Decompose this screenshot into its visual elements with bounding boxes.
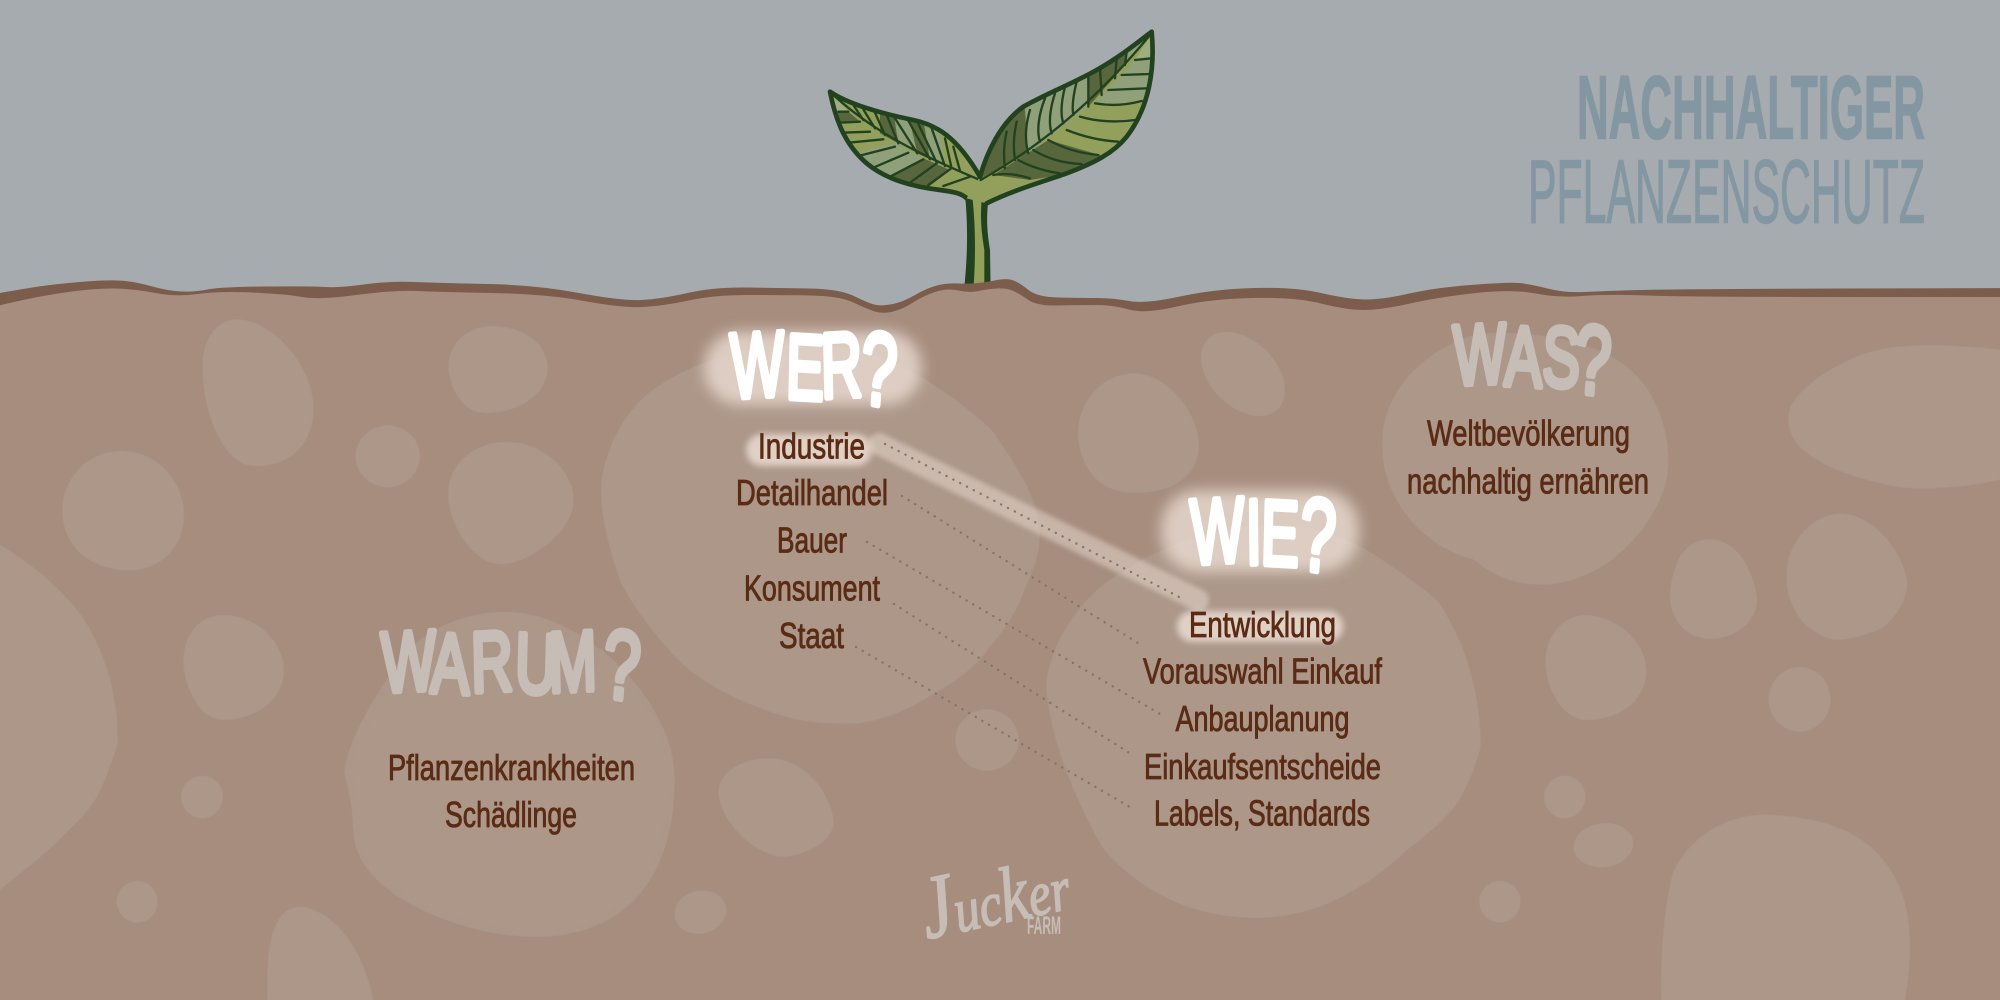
soil stones right <box>1479 345 2000 1000</box>
soil stones centre <box>718 315 1302 857</box>
left leaf <box>830 92 980 198</box>
title <box>1528 58 1925 242</box>
heading: WIE?: WIE? <box>1189 476 1339 597</box>
list: measures: Vorauswahl Einkauf <box>1143 650 1383 692</box>
blob: WAS area <box>1382 333 1668 585</box>
list: actors: Konsument <box>744 568 880 609</box>
logo: Jucker Farm: FARM <box>1027 912 1061 940</box>
list: actors: Staat <box>779 615 844 656</box>
blob: WER area <box>601 345 1040 724</box>
panel: WER <box>704 310 922 656</box>
text: goal <box>1407 412 1649 502</box>
connector lines <box>856 444 1181 810</box>
list: actors: Bauer <box>777 520 847 561</box>
blob: WIE area <box>1046 525 1481 918</box>
highlight band: Industrie to Entwicklung <box>879 444 1198 600</box>
soil ground <box>0 288 2000 1000</box>
soil surface line <box>0 279 2000 340</box>
list: measures: Entwicklung <box>1189 604 1336 645</box>
list: measures: Labels, Standards <box>1154 793 1370 834</box>
right leaf <box>967 32 1157 203</box>
panel: WIE <box>1143 476 1383 834</box>
heading: WAS?: WAS? <box>1452 303 1615 418</box>
logo: Jucker Farm: Jucker <box>910 830 1078 959</box>
list: measures: Anbauplanung <box>1176 698 1350 739</box>
sky background <box>0 0 2000 320</box>
text: reasons: Pflanzenkrankheiten <box>388 747 635 788</box>
list: actors: Industrie <box>758 426 865 467</box>
text: goal: nachhaltig ernähren <box>1407 461 1649 502</box>
list: measures <box>1143 604 1383 834</box>
panel: WARUM <box>380 608 644 835</box>
heading: WARUM?: WARUM? <box>380 608 644 723</box>
soil stones left <box>0 319 732 1000</box>
heading: WER?: WER? <box>729 310 900 431</box>
list: measures: Einkaufsentscheide <box>1144 746 1381 787</box>
text: reasons: Schädlinge <box>445 794 577 835</box>
text: reasons <box>388 747 635 835</box>
text: goal: Weltbevölkerung <box>1427 412 1630 454</box>
list: actors: Detailhandel <box>736 472 888 513</box>
panel: WAS <box>1407 303 1649 502</box>
list: actors <box>736 426 888 656</box>
icon: seedling plant <box>830 32 1157 290</box>
blob: WARUM area <box>344 612 675 937</box>
stem <box>964 195 991 290</box>
